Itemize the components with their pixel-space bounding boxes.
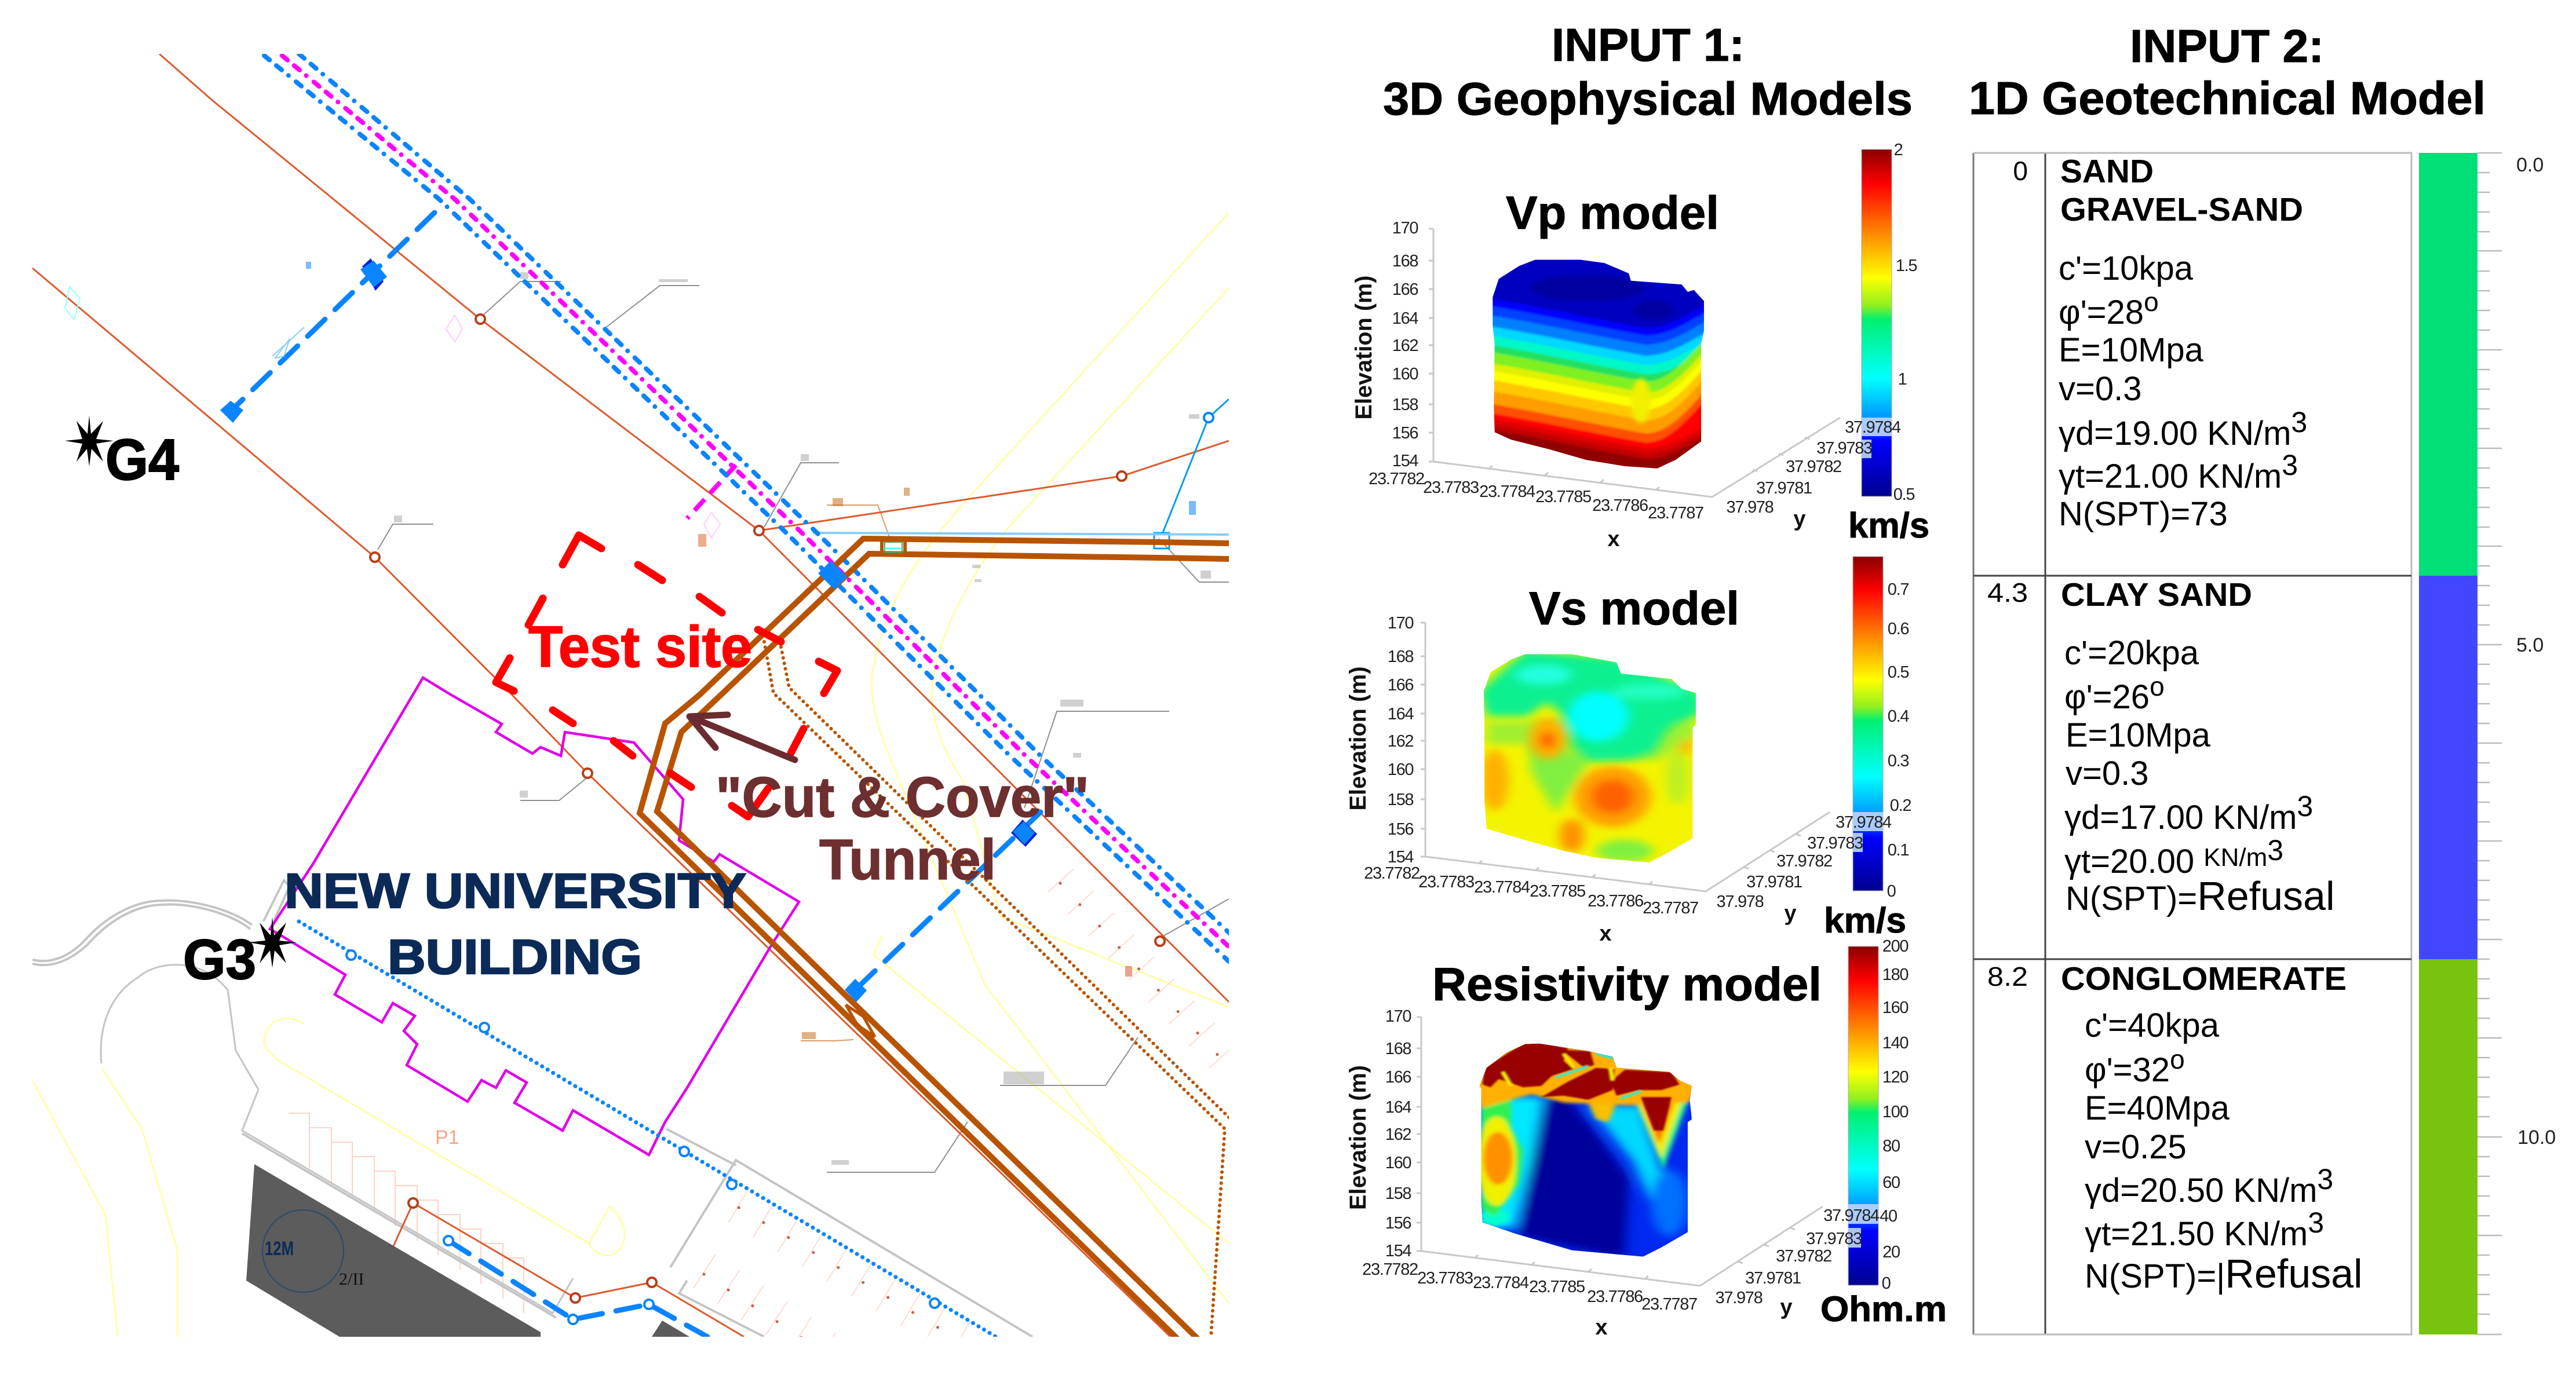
x-axis ticks: 23.7783 (1417, 1269, 1473, 1288)
unit: km/s (1824, 901, 1906, 940)
row: clay sand: v=0.3 (2066, 755, 2148, 792)
y-axis ticks: 164 (1392, 309, 1418, 328)
heading: Vs model: Vs model (1529, 583, 1739, 635)
row: sand gravel-sand: φ'=28 (2059, 294, 2144, 331)
axis letters: y (1793, 507, 1806, 531)
y-axis ticks: 168 (1392, 252, 1418, 270)
row: clay sand (1987, 576, 2335, 919)
row: conglomerate (1987, 960, 2363, 1296)
colour bar ticks: 80 (1882, 1137, 1900, 1155)
y-axis ticks: 158 (1385, 1184, 1411, 1203)
row: conglomerate: N(SPT)=|Refusal (2085, 1251, 2363, 1296)
row: conglomerate: o (2170, 1044, 2185, 1074)
map: blue manhole circles (346, 413, 1213, 1324)
map: magenta building outline (270, 678, 799, 1155)
latitude label highlights (1862, 418, 1892, 458)
y-axis ticks: 170 (1385, 1007, 1411, 1026)
axis letters: y (1784, 901, 1797, 926)
arrow: tunnel pointer (689, 715, 795, 760)
latitude ticks: 37.9782 (1776, 852, 1832, 871)
x-axis ticks: 23.7785 (1535, 488, 1591, 506)
map: dotted cut-and-cover outline (764, 642, 1234, 1337)
label: cut and cover tunnel (716, 765, 1089, 891)
latitude ticks (1717, 813, 1892, 911)
colour bar ticks: 0 (1882, 1274, 1891, 1293)
y-axis ticks (1392, 219, 1418, 470)
row: clay sand: 4.3 (1987, 577, 2028, 608)
latitude ticks: 37.9782 (1786, 458, 1841, 476)
map: parking stalls (289, 880, 1251, 1375)
latitude ticks: 37.978 (1716, 1289, 1763, 1307)
heading: Vp model: Vp model (1506, 187, 1719, 239)
row: sand gravel-sand: N(SPT)=73 (2059, 495, 2228, 533)
latitude ticks: 37.978 (1727, 498, 1774, 517)
label: 12M: 12M (265, 1238, 294, 1260)
map: grey roads (32, 880, 1032, 1337)
x-axis ticks (1364, 864, 1698, 917)
latitude ticks: 37.9783 (1816, 439, 1872, 458)
x-axis ticks: 23.7786 (1587, 1288, 1643, 1306)
label: P1: P1 (435, 1127, 459, 1149)
row: conglomerate: E=40Mpa (2085, 1089, 2230, 1127)
colour bar ticks: 60 (1882, 1173, 1900, 1192)
heading: input 2: 1D Geotechnical Model (1969, 72, 2486, 124)
layer: conglomerate (2419, 959, 2478, 1334)
y-axis ticks: 166 (1392, 280, 1418, 299)
colour bar ticks: 40 (1880, 1207, 1897, 1226)
heading: input 1 (1383, 19, 1913, 125)
table frame (1973, 153, 2411, 1334)
x-axis ticks: 23.7782 (1362, 1260, 1418, 1279)
axis letters (1595, 1295, 1793, 1340)
layer: clay sand (2419, 576, 2478, 959)
label: G4: G4 (105, 427, 179, 492)
label: new university building: BUILDING (388, 930, 642, 984)
row: conglomerate: φ'=32 (2085, 1051, 2170, 1089)
y-axis ticks (1388, 614, 1414, 866)
colour bar ticks (1880, 937, 1908, 1293)
axis title: Elevation (m) (1345, 666, 1371, 811)
map: yellow alignment curves (32, 213, 1229, 1337)
label: test site: Test site (528, 615, 752, 679)
map: faint small diamonds (65, 287, 720, 537)
row: sand gravel-sand: SAND (2060, 153, 2154, 190)
x-axis ticks: 23.7787 (1643, 899, 1698, 917)
y-axis ticks: 156 (1392, 424, 1418, 443)
depth labels: 0.0 (2516, 154, 2544, 176)
colour bar ticks: 100 (1882, 1103, 1908, 1121)
x-axis ticks (1362, 1260, 1697, 1314)
heading: input 2: INPUT 2: (2130, 20, 2324, 72)
chart axes (1421, 623, 1830, 891)
row: clay sand: γd=17.00 KN/m (2064, 799, 2297, 836)
map: blue and magenta dashed utility corridor (264, 54, 1260, 961)
row: sand gravel-sand: γt=21.00 KN/m (2059, 458, 2282, 495)
label: cut and cover tunnel: "Cut & Cover" (716, 765, 1089, 829)
row: sand gravel-sand: 0 (2013, 156, 2028, 186)
label: new university building (284, 864, 746, 984)
heading: input 2 (1969, 20, 2486, 124)
depth labels (2516, 154, 2556, 1149)
panel: Vp model (1351, 141, 1929, 726)
latitude ticks: 37.9784 (1823, 1206, 1880, 1225)
latitude label highlights (1848, 1204, 1878, 1248)
row: clay sand: N(SPT)=Refusal (2066, 873, 2335, 919)
map: red dots in stalls (702, 882, 1219, 1337)
y-axis ticks: 170 (1392, 219, 1418, 237)
axis letters (1599, 901, 1797, 946)
x-axis ticks: 23.7784 (1474, 878, 1530, 897)
colour bar ticks (1893, 141, 1917, 504)
y-axis ticks: 164 (1385, 1098, 1411, 1117)
row: conglomerate: 8.2 (1987, 961, 2028, 992)
heading: input 1: INPUT 1: (1552, 19, 1745, 71)
colour bar ticks: 0.5 (1893, 485, 1914, 504)
x-axis ticks: 23.7785 (1530, 882, 1585, 901)
colour bar ticks: 0.4 (1888, 707, 1909, 726)
y-axis ticks: 158 (1392, 396, 1418, 414)
row: conglomerate: γd=20.50 KN/m (2085, 1172, 2317, 1209)
row: clay sand: c'=20kpa (2064, 634, 2199, 672)
axis letters: x (1595, 1315, 1608, 1340)
3D volume: resistivity (1475, 1041, 1698, 1261)
label: new university building: NEW UNIVERSITY (284, 864, 746, 918)
colour bar ticks: 140 (1882, 1034, 1908, 1052)
label: 2/II: 2/II (339, 1270, 364, 1289)
colour bar ticks: 0.1 (1888, 841, 1909, 860)
latitude ticks: 37.9781 (1756, 479, 1812, 498)
colour bar ticks: 0 (1887, 882, 1896, 901)
row: sand gravel-sand: v=0.3 (2059, 370, 2141, 408)
row: conglomerate: 3 (2317, 1163, 2333, 1195)
x-axis ticks (1369, 470, 1703, 522)
row: sand gravel-sand: 3 (2291, 406, 2307, 438)
row: clay sand: E=10Mpa (2066, 716, 2211, 754)
x-axis ticks: 23.7783 (1423, 478, 1479, 497)
map: orange manhole circles (370, 315, 1165, 1303)
heading: Resistivity model: Resistivity model (1432, 959, 1822, 1011)
y-axis ticks (1385, 1007, 1411, 1260)
map: tiny annotation smudges (306, 262, 1211, 1165)
row: clay sand: CLAY SAND (2061, 576, 2252, 613)
colour bar ticks: 0.3 (1888, 752, 1909, 770)
axis letters: y (1780, 1295, 1793, 1319)
y-axis ticks: 156 (1388, 820, 1413, 839)
axis letters: x (1599, 921, 1612, 946)
colour bar ticks: 0.7 (1888, 580, 1909, 599)
y-axis ticks: 158 (1388, 791, 1413, 809)
row: sand gravel-sand: γd=19.00 KN/m (2059, 415, 2291, 452)
colour bar ticks: 0.6 (1888, 620, 1909, 638)
row: clay sand: 3 (2297, 790, 2313, 822)
row: clay sand: φ'=26 (2064, 678, 2150, 716)
row: conglomerate: CONGLOMERATE (2061, 960, 2347, 997)
colour bar ticks: 2 (1894, 141, 1903, 159)
map: bright blue service line (1154, 399, 1229, 548)
y-axis ticks: 168 (1385, 1040, 1411, 1058)
colour bar ticks: 1 (1898, 370, 1907, 389)
colour bar ticks: 0.2 (1890, 796, 1911, 815)
y-axis ticks: 166 (1385, 1068, 1411, 1087)
latitude ticks: 37.9783 (1807, 834, 1863, 853)
depth labels: 5.0 (2516, 634, 2544, 656)
y-axis ticks: 154 (1392, 452, 1418, 470)
latitude ticks (1727, 418, 1901, 517)
x-axis ticks: 23.7786 (1592, 496, 1648, 515)
chart axes (1417, 1017, 1823, 1286)
row: conglomerate: γt=21.50 KN/m (2085, 1215, 2308, 1253)
row: sand gravel-sand: GRAVEL-SAND (2060, 191, 2303, 228)
y-axis ticks: 162 (1388, 732, 1413, 751)
y-axis ticks: 160 (1388, 760, 1413, 779)
row: sand gravel-sand: o (2144, 287, 2159, 317)
colour bar ticks: 180 (1882, 966, 1908, 984)
map: pipe junction markers (220, 258, 1037, 1002)
y-axis ticks: 166 (1388, 676, 1413, 694)
row: conglomerate: 3 (2308, 1206, 2324, 1239)
row: sand gravel-sand: E=10Mpa (2059, 331, 2204, 369)
x-axis ticks: 23.7782 (1364, 864, 1420, 883)
map: blue branch dashes (232, 213, 1041, 1337)
panel: Resistivity model (1345, 937, 1947, 1340)
y-axis ticks: 162 (1385, 1125, 1411, 1144)
y-axis ticks: 154 (1388, 848, 1414, 866)
label: G3: G3 (183, 928, 256, 991)
axis letters: x (1607, 527, 1620, 551)
axis title: Elevation (m) (1345, 1065, 1371, 1210)
x-axis ticks: 23.7783 (1418, 873, 1474, 891)
panel: geotechnical table (1973, 153, 2411, 1334)
layer: sand (2419, 153, 2478, 576)
x-axis ticks: 23.7786 (1588, 892, 1643, 910)
y-axis ticks: 164 (1388, 705, 1414, 723)
unit: km/s (1848, 506, 1929, 545)
colour bar ticks: 120 (1882, 1068, 1908, 1087)
row: sand gravel-sand: c'=10kpa (2059, 250, 2194, 287)
depth ticks (2478, 153, 2502, 1334)
chart axes (1429, 229, 1840, 497)
x-axis ticks: 23.7787 (1648, 504, 1703, 522)
row: sand gravel-sand: 3 (2282, 449, 2298, 481)
map: magenta branch dashes (687, 465, 736, 518)
latitude ticks: 37.9781 (1745, 1269, 1801, 1288)
latitude ticks: 37.9781 (1746, 873, 1802, 891)
colour bar ticks: 200 (1882, 937, 1908, 956)
y-axis ticks: 168 (1388, 648, 1413, 666)
latitude ticks: 37.9784 (1845, 418, 1901, 437)
panel: site map (32, 54, 1260, 1375)
panel: Vs model (1345, 557, 1911, 946)
colour bar ticks: 0.5 (1888, 663, 1909, 682)
row: clay sand: γt=20.00 (2064, 843, 2194, 880)
x-axis ticks: 23.7784 (1473, 1274, 1529, 1292)
y-axis ticks: 162 (1392, 337, 1418, 355)
x-axis ticks: 23.7785 (1529, 1278, 1585, 1296)
row: sand gravel-sand (2013, 153, 2307, 533)
colour bar: Vs (1853, 557, 1883, 891)
colour bar: Vp (1862, 149, 1892, 496)
y-axis ticks: 160 (1385, 1154, 1411, 1172)
axis title: Elevation (m) (1351, 276, 1377, 419)
icon: G3 star (248, 917, 297, 968)
colour bar ticks: 160 (1882, 999, 1908, 1017)
axis letters (1607, 507, 1806, 551)
colour bar ticks: 20 (1882, 1243, 1900, 1261)
3D volume: Vs (1479, 650, 1702, 866)
colour bar: resistivity (1848, 946, 1878, 1285)
heading: input 1: 3D Geophysical Models (1383, 73, 1913, 125)
x-axis ticks: 23.7782 (1369, 470, 1424, 488)
latitude ticks: 37.978 (1717, 893, 1764, 911)
map: dark building polygons (246, 1164, 541, 1337)
y-axis ticks: 156 (1385, 1214, 1411, 1233)
latitude ticks (1716, 1206, 1880, 1307)
x-axis ticks: 23.7787 (1641, 1295, 1697, 1314)
map: thin leader lines (378, 281, 1229, 1172)
latitude ticks: 37.9782 (1776, 1247, 1831, 1266)
latitude ticks: 37.9783 (1806, 1230, 1862, 1248)
y-axis ticks: 160 (1392, 365, 1418, 383)
row: conglomerate: v=0.25 (2085, 1128, 2187, 1166)
latitude ticks: 37.9784 (1836, 813, 1892, 832)
latitude label highlights (1853, 812, 1883, 852)
3D volume: Vp (1483, 255, 1710, 726)
row: clay sand: 3 (2267, 834, 2283, 866)
row: clay sand: o (2150, 671, 2165, 701)
label: cut and cover tunnel: Tunnel (819, 828, 996, 891)
depth labels: 10.0 (2517, 1127, 2556, 1149)
row: conglomerate: c'=40kpa (2085, 1007, 2220, 1044)
colour bar ticks (1887, 580, 1911, 901)
y-axis ticks: 154 (1385, 1242, 1411, 1260)
map: tunnel double line (640, 539, 1229, 1344)
test site dashed red boundary (496, 535, 837, 817)
row: clay sand: KN/m (2203, 843, 2267, 872)
icon: G4 star (65, 415, 114, 466)
colour bar ticks: 1.5 (1896, 257, 1917, 275)
x-axis ticks: 23.7784 (1479, 482, 1535, 501)
map: blue dotted line (299, 921, 996, 1337)
panel: depth column (2419, 153, 2556, 1334)
unit: Ohm.m (1820, 1289, 1947, 1329)
map: orange utility lines (32, 54, 1229, 1337)
y-axis ticks: 170 (1388, 614, 1413, 632)
